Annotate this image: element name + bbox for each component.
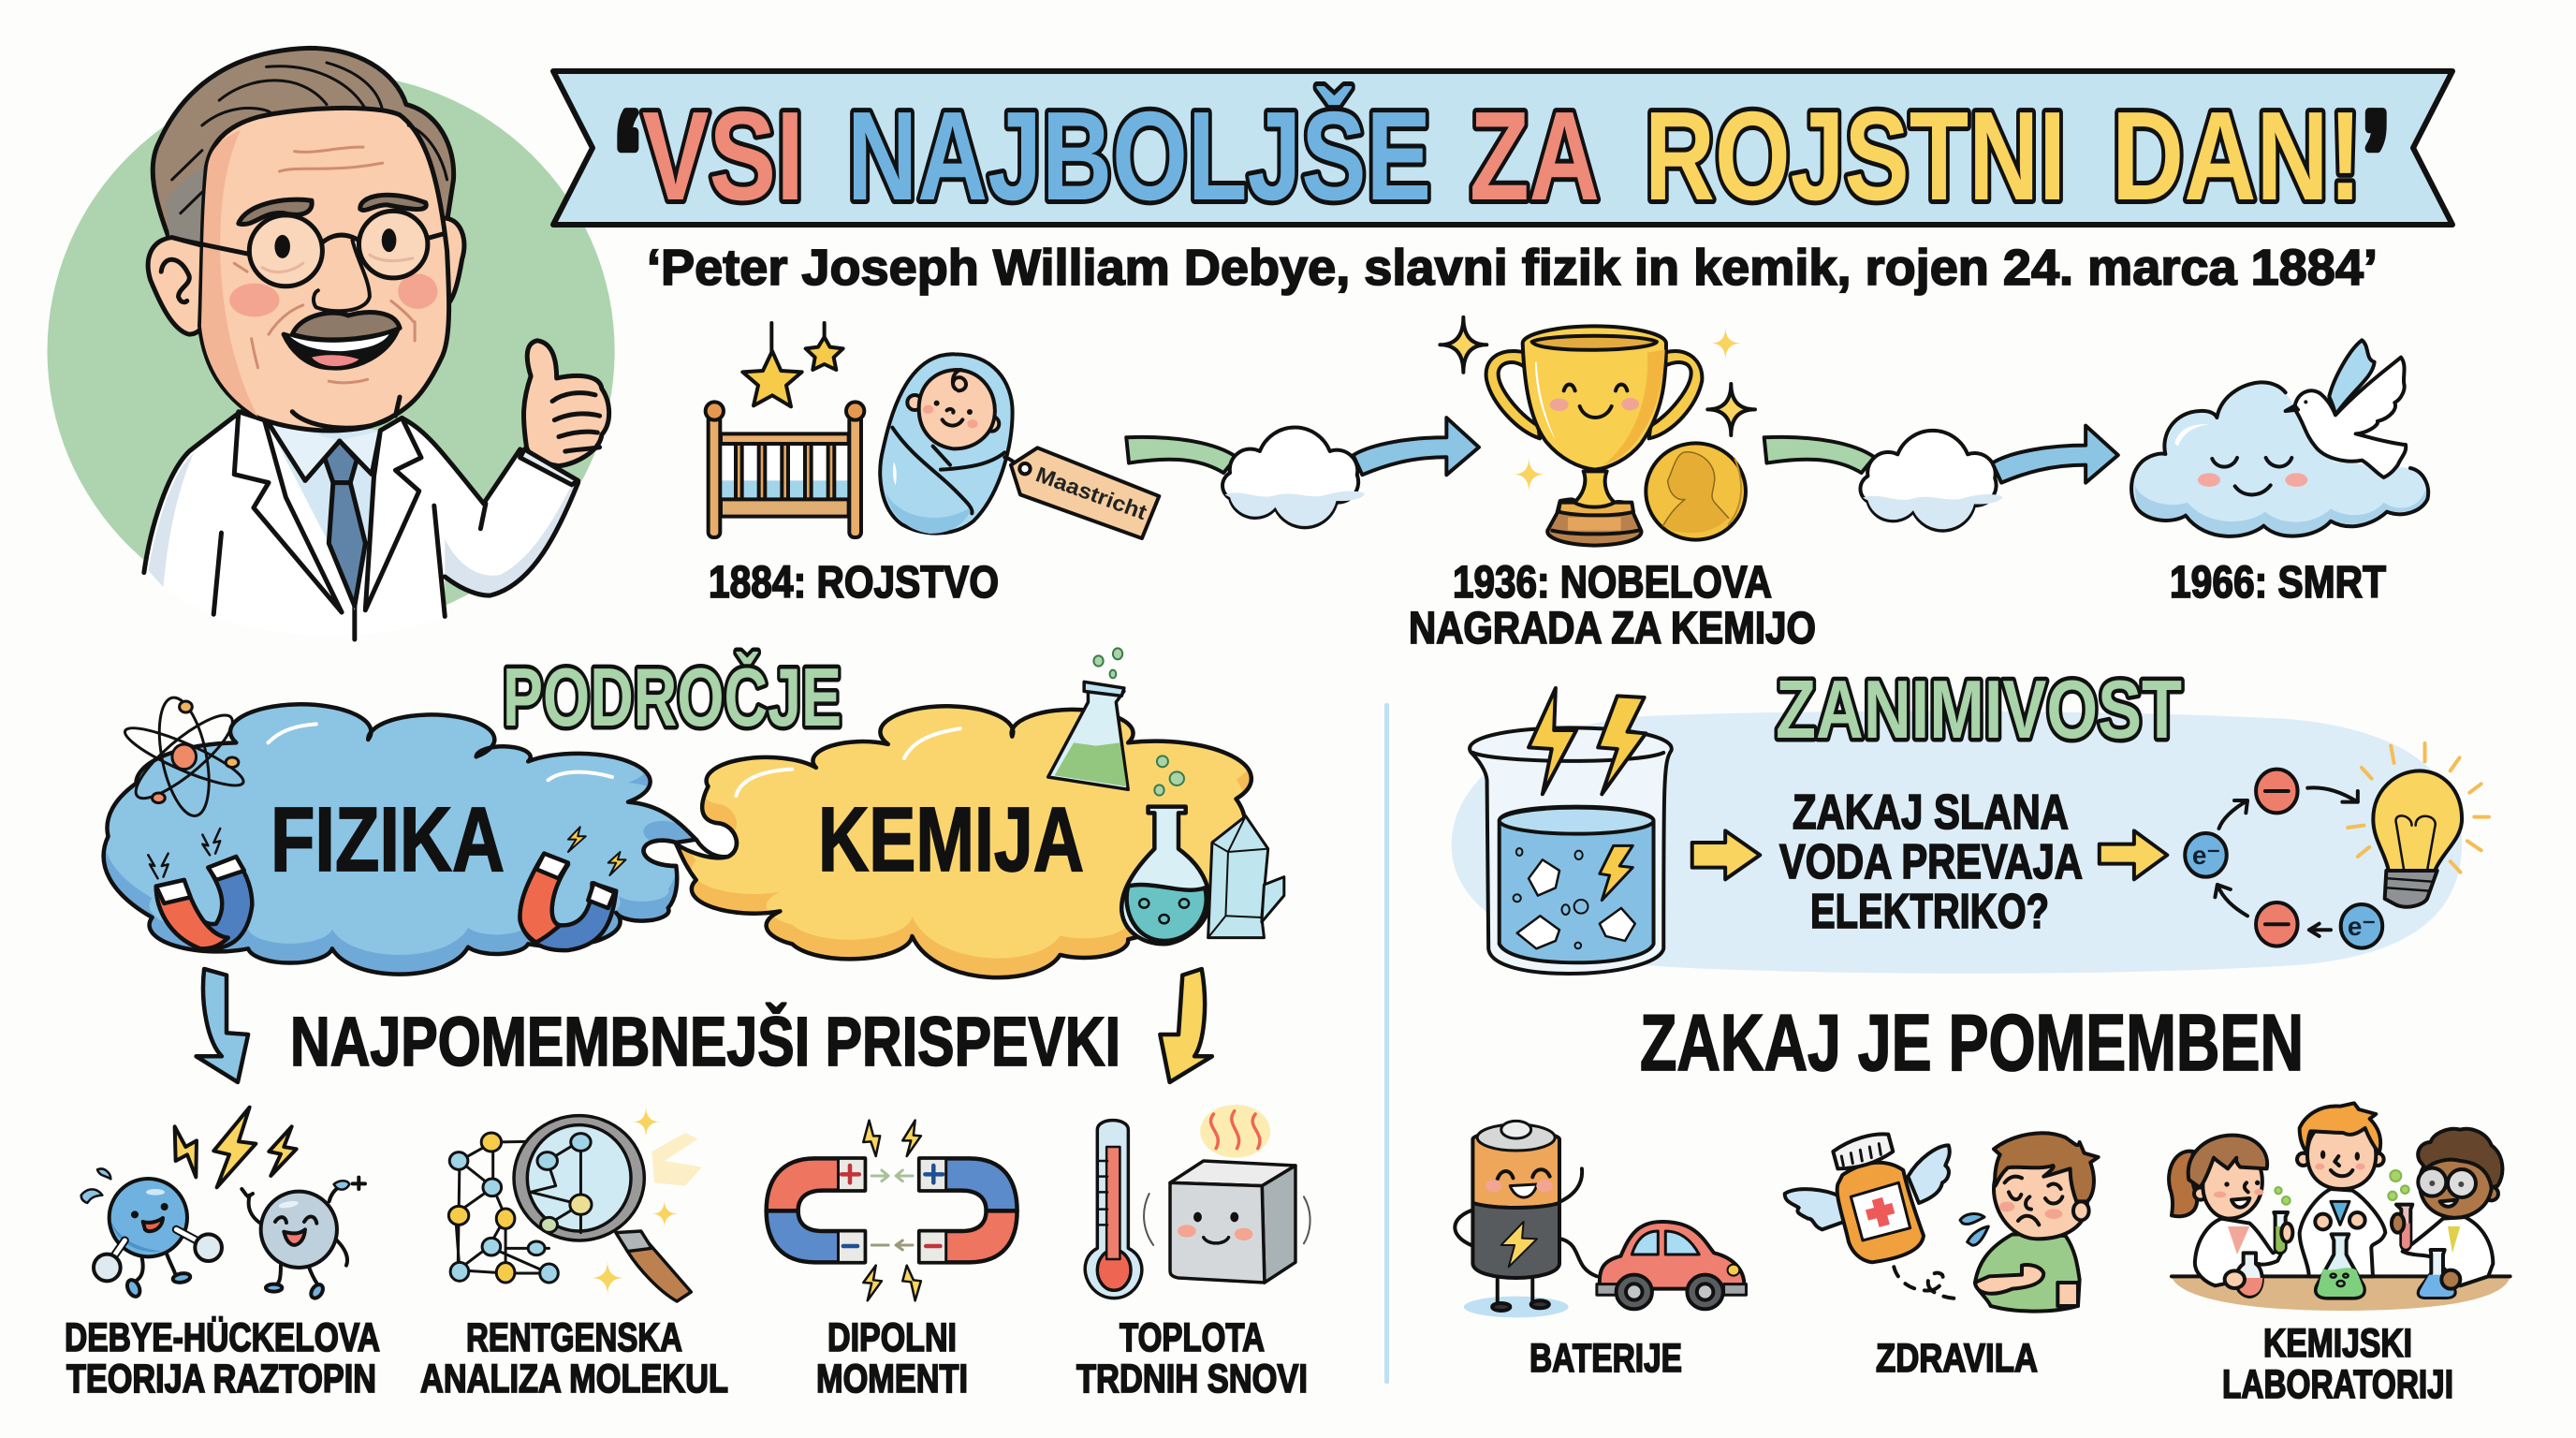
label: debye-huckel <box>65 1315 380 1401</box>
eyes <box>274 228 396 258</box>
label: debye-huckel: TEORIJA RAZTOPIN <box>66 1357 376 1401</box>
left ear <box>148 238 211 334</box>
arrow: blue swoosh 1 <box>1354 418 1479 475</box>
arrow: green swoosh 1 <box>1126 437 1237 473</box>
girl flask and tube <box>2225 1212 2292 1297</box>
icon: green bubbles <box>1093 648 1184 796</box>
title word: NAJBOLJŠE: NAJBOLJŠE <box>847 85 1431 227</box>
cloud face <box>2198 458 2307 494</box>
timeline arrows and clouds <box>1126 317 2118 531</box>
label: 1936: NAGRADA ZA KEMIJO <box>1409 604 1816 653</box>
icon: sparkles and glow <box>591 1107 702 1295</box>
contribution labels <box>65 1315 1308 1401</box>
girl scientist <box>2169 1136 2284 1285</box>
moustache <box>292 313 400 340</box>
arrow: blue swoosh 2 <box>1992 426 2118 483</box>
glasses <box>183 211 443 286</box>
icon: round flask <box>1121 807 1209 944</box>
cloud <box>2131 382 2428 536</box>
panel: zanimivost <box>1452 688 2489 974</box>
ear inner <box>161 259 189 302</box>
label: dipolni: DIPOLNI <box>827 1315 957 1360</box>
icon: cloud 2 <box>1860 431 2003 531</box>
label: kemijski laboratoriji: KEMIJSKI <box>2263 1321 2412 1366</box>
teeth <box>290 334 389 351</box>
icon: cloud 1 <box>1222 428 1365 527</box>
dove <box>2286 340 2406 477</box>
Maastricht tag shape <box>1004 448 1159 538</box>
contributions icons <box>448 1105 1310 1301</box>
shirt and tie <box>234 412 421 612</box>
heading: zanimivost: ZANIMIVOST <box>1776 663 2182 756</box>
hair <box>153 48 454 268</box>
label: debye-huckel: DEBYE-HÜCKELOVA <box>65 1315 380 1360</box>
floating bubbles <box>2275 1170 2409 1205</box>
icon: charged particles <box>81 1108 365 1300</box>
electron label 1: e⁻ <box>2192 841 2220 870</box>
blue ion <box>81 1168 222 1299</box>
title word: opening quote and VSI: ‘VSI <box>614 85 804 227</box>
title word: ROJSTNI: ROJSTNI <box>1645 85 2066 227</box>
cloud: kemija <box>676 687 1251 977</box>
hand thumbs up <box>520 341 609 485</box>
hair strands <box>172 63 447 213</box>
heading: zakaj je pomemben: ZAKAJ JE POMEMBEN <box>1640 999 2304 1088</box>
icon: electron cycle <box>2185 770 2382 948</box>
label: zdravila: ZDRAVILA <box>1876 1336 2038 1381</box>
question text: ELEKTRIKO? <box>1810 885 2049 939</box>
icon: crib stars baby and tag <box>706 323 1159 538</box>
face shading <box>201 129 258 417</box>
heading: najpomembnejsi prispevki: NAJPOMEMBNEJŠI PRISPEVKI <box>290 1003 1120 1080</box>
dark-haired scientist <box>2403 1129 2502 1285</box>
arrow: green swoosh 2 <box>1764 437 1874 473</box>
green circle background <box>48 73 615 629</box>
cloud: fizika <box>104 685 732 975</box>
right ear <box>443 218 464 307</box>
label: kemija: KEMIJA <box>818 788 1084 890</box>
label: 1936 <box>1409 558 1816 653</box>
icon: red car <box>1597 1222 1746 1309</box>
icon: beaker with salt water <box>1470 727 1672 974</box>
cup <box>1523 326 1666 470</box>
icon: conical flask <box>1048 682 1128 789</box>
importance icons: battery and car <box>1455 1121 1746 1317</box>
eyebrows <box>239 195 426 225</box>
tongue <box>312 355 359 366</box>
icon: crystals <box>1208 816 1284 938</box>
arrow: yellow right 1 <box>1692 830 1760 879</box>
sick boy <box>1975 1133 2099 1312</box>
icon: magnifier over lattice <box>448 1116 691 1301</box>
lightning <box>175 1108 297 1187</box>
icon: lightning bolts <box>1529 688 1646 794</box>
question text: ZAKAJ SLANA <box>1793 785 2069 840</box>
label: 1884: 1884: ROJSTVO <box>709 558 999 608</box>
title word: DAN: DAN!’ <box>2112 85 2390 227</box>
label: toplota <box>1076 1315 1308 1401</box>
dark-haired scientist tube and flask <box>2392 1205 2460 1298</box>
icon: kids in laboratory <box>2169 1103 2510 1311</box>
lab coat <box>144 412 578 639</box>
icon: smiling cube <box>1144 1161 1310 1283</box>
label: kemijski laboratoriji <box>2222 1321 2453 1407</box>
sparkle near trophy <box>1440 317 1486 373</box>
panel: field clouds and contributions heading <box>104 648 1284 1082</box>
handles <box>1486 351 1702 438</box>
lab table <box>2172 1276 2510 1311</box>
nose <box>314 241 370 311</box>
chin line <box>292 397 400 428</box>
label: 1966: 1966: SMRT <box>2170 558 2386 608</box>
question text <box>1779 785 2083 939</box>
icon: thermometer <box>1085 1121 1142 1299</box>
boy scientist <box>2297 1103 2385 1276</box>
arrow: yellow down <box>1160 969 1212 1082</box>
stem <box>1574 471 1615 507</box>
banner ribbon <box>553 71 2452 225</box>
label: baterije: BATERIJE <box>1530 1336 1682 1381</box>
title word: ZA: ZA <box>1470 85 1600 227</box>
trophy face <box>1550 385 1639 418</box>
question text: VODA PREVAJA <box>1779 835 2083 889</box>
arrow: yellow right 2 <box>2100 830 2167 879</box>
label: toplota: TRDNIH SNOVI <box>1076 1357 1308 1401</box>
base <box>1547 499 1641 546</box>
panel background <box>1452 712 2462 974</box>
label: rentgenska: ANALIZA MOLEKUL <box>420 1357 728 1401</box>
icon: right magnet <box>520 827 625 950</box>
section divider <box>1384 703 1389 1384</box>
heading: podrocje: PODROČJE <box>503 651 842 743</box>
icon: atom <box>110 697 259 816</box>
medicine wings <box>1785 1145 1950 1229</box>
sparkles <box>1514 327 1755 492</box>
sweat drops <box>1960 1214 1988 1245</box>
icon: trophy and nobel coin <box>1486 326 1755 546</box>
center green flask <box>2316 1234 2364 1299</box>
mouth <box>284 330 398 368</box>
subtitle: ‘Peter Joseph William Debye, slavni fizik in kemik, rojen 24. marca 1884’ <box>647 240 2378 296</box>
icon: sleeping cloud and dove <box>2131 340 2428 536</box>
label: rentgenska <box>420 1315 728 1401</box>
icon: light bulb <box>2373 770 2462 907</box>
arrow: blue down <box>197 969 248 1082</box>
icon: heat waves <box>1200 1105 1270 1158</box>
forehead wrinkles <box>234 147 415 383</box>
crib <box>706 402 864 537</box>
label: rentgenska: RENTGENSKA <box>466 1315 682 1360</box>
puzzle knob outlines <box>643 823 737 866</box>
face <box>200 108 449 431</box>
cheeks <box>229 273 437 316</box>
nobel coin <box>1646 443 1746 540</box>
icon: lightning <box>863 1121 921 1300</box>
icon: left magnet <box>148 829 252 949</box>
icon: dipole magnets <box>767 1158 1017 1262</box>
dashed flight path <box>1894 1267 1963 1299</box>
icon: winged medicine and sick boy <box>1785 1133 2099 1312</box>
label: dipolni: MOMENTI <box>816 1357 968 1401</box>
icon: battery <box>1455 1121 1597 1317</box>
swaddled baby <box>880 354 1013 534</box>
title banner <box>553 71 2452 227</box>
temple grey hair <box>166 165 211 246</box>
label: toplota: TOPLOTA <box>1120 1315 1265 1360</box>
hanging stars <box>742 323 843 406</box>
silver ion <box>242 1178 365 1300</box>
label: dipolni <box>816 1315 968 1401</box>
electron label 2: e⁻ <box>2348 912 2376 941</box>
medicine bottle <box>1833 1134 1924 1262</box>
icon: bulb rays <box>2348 743 2489 873</box>
label: Maastricht tag: Maastricht <box>1032 462 1150 524</box>
label: fizika: FIZIKA <box>271 788 505 890</box>
portrait: Peter Debye <box>48 48 615 639</box>
label: 1936: 1936: NOBELOVA <box>1453 558 1772 608</box>
label: kemijski laboratoriji: LABORATORIJI <box>2222 1362 2453 1407</box>
